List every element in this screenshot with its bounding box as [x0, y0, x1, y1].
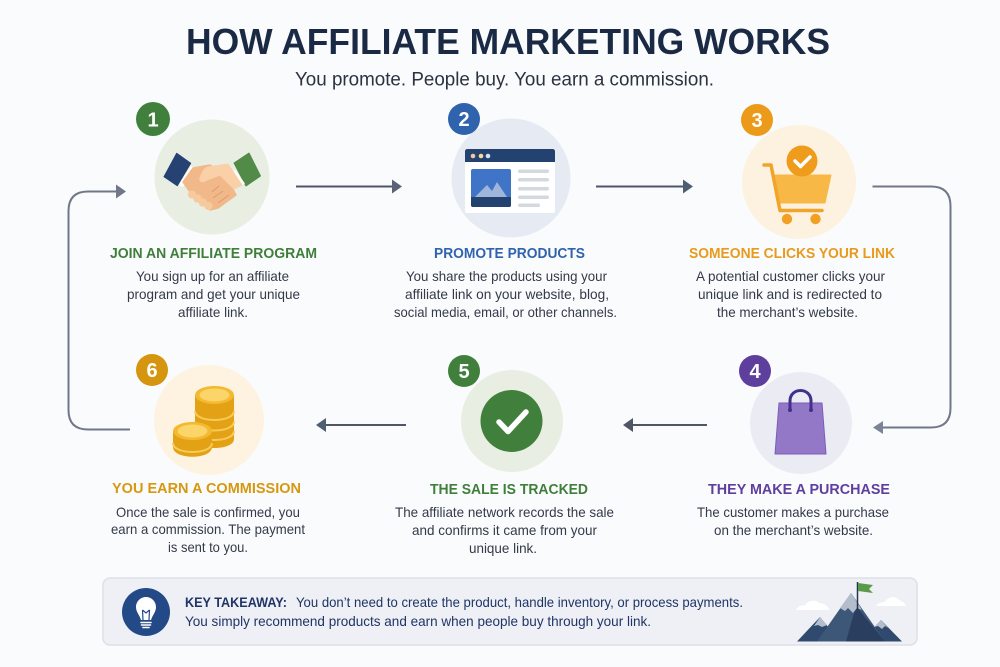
step 4: they make a purchase	[697, 355, 890, 538]
description: unique link and is redirected to	[698, 286, 882, 302]
description: Once the sale is confirmed, you	[116, 504, 300, 520]
description: and confirms it came from your	[412, 522, 597, 538]
number badge 4: 4	[749, 361, 761, 383]
description	[127, 268, 300, 320]
description	[696, 268, 885, 320]
description: You sign up for an affiliate	[136, 268, 289, 284]
description: affiliate link on your website, blog,	[405, 286, 609, 302]
icon: handshake	[154, 120, 270, 234]
number badge 5	[448, 355, 480, 387]
icon: check mark circle	[461, 370, 563, 472]
description: earn a commission. The payment	[111, 521, 305, 537]
number badge 3: 3	[751, 110, 763, 132]
heading: THE SALE IS TRACKED	[430, 482, 588, 498]
number badge 6: 6	[146, 360, 158, 382]
takeaway text: You don’t need to create the product, handle inventory, or process payments.	[296, 594, 743, 610]
heading: SOMEONE CLICKS YOUR LINK	[689, 246, 896, 262]
takeaway text	[185, 594, 743, 629]
icon: browser window	[452, 118, 570, 238]
takeaway text: You simply recommend products and earn when people buy through your link.	[185, 613, 651, 629]
description: on the merchant’s website.	[714, 522, 873, 538]
arrow: step 5 to step 6	[316, 418, 406, 432]
heading: YOU EARN A COMMISSION	[112, 481, 301, 497]
step 3: someone clicks your link	[689, 104, 896, 320]
description: You share the products using your	[406, 268, 607, 284]
takeaway text: KEY TAKEAWAY:	[185, 594, 287, 610]
arrow: step 1 to step 2	[296, 180, 402, 194]
panel: key takeaway	[103, 578, 917, 645]
arrow: step 3 down to step 4	[872, 186, 950, 434]
arrow: step 4 to step 5	[623, 418, 707, 432]
number badge 2	[448, 103, 480, 135]
number badge 1	[136, 102, 170, 136]
description: unique link.	[469, 540, 537, 556]
number badge 5: 5	[458, 361, 470, 383]
number badge 1: 1	[147, 110, 159, 132]
description: program and get your unique	[127, 286, 300, 302]
description: affiliate link.	[178, 304, 248, 320]
step 5: the sale is tracked	[395, 355, 614, 556]
icon: shopping bag	[750, 372, 852, 474]
description: social media, email, or other channels.	[394, 304, 617, 320]
subtitle: You promote. People buy. You earn a commission.	[295, 68, 714, 90]
heading: PROMOTE PRODUCTS	[434, 246, 585, 262]
icon: coin stacks	[154, 365, 264, 475]
heading: THEY MAKE A PURCHASE	[708, 482, 890, 498]
description	[395, 504, 614, 556]
arrow: step 2 to step 3	[596, 180, 693, 194]
number badge 6	[136, 354, 168, 386]
icon: mountains with flag	[796, 582, 906, 642]
arrow: step 6 back up to step 1	[68, 184, 130, 430]
heading: JOIN AN AFFILIATE PROGRAM	[110, 246, 317, 262]
description: A potential customer clicks your	[696, 268, 885, 284]
step 2: promote products	[394, 103, 617, 320]
description	[697, 504, 889, 538]
icon: shopping cart with check	[742, 125, 856, 239]
description	[394, 268, 617, 320]
description: is sent to you.	[168, 539, 248, 555]
description	[111, 504, 305, 555]
description: The affiliate network records the sale	[395, 504, 614, 520]
icon: lightbulb	[122, 588, 170, 636]
number badge 4	[739, 355, 771, 387]
step 1: join an affiliate program	[110, 102, 317, 320]
title: HOW AFFILIATE MARKETING WORKS	[186, 21, 830, 62]
number badge 2: 2	[458, 109, 470, 131]
description: the merchant’s website.	[717, 304, 858, 320]
step 6: you earn a commission	[111, 354, 305, 555]
number badge 3	[741, 104, 773, 136]
description: The customer makes a purchase	[697, 504, 889, 520]
